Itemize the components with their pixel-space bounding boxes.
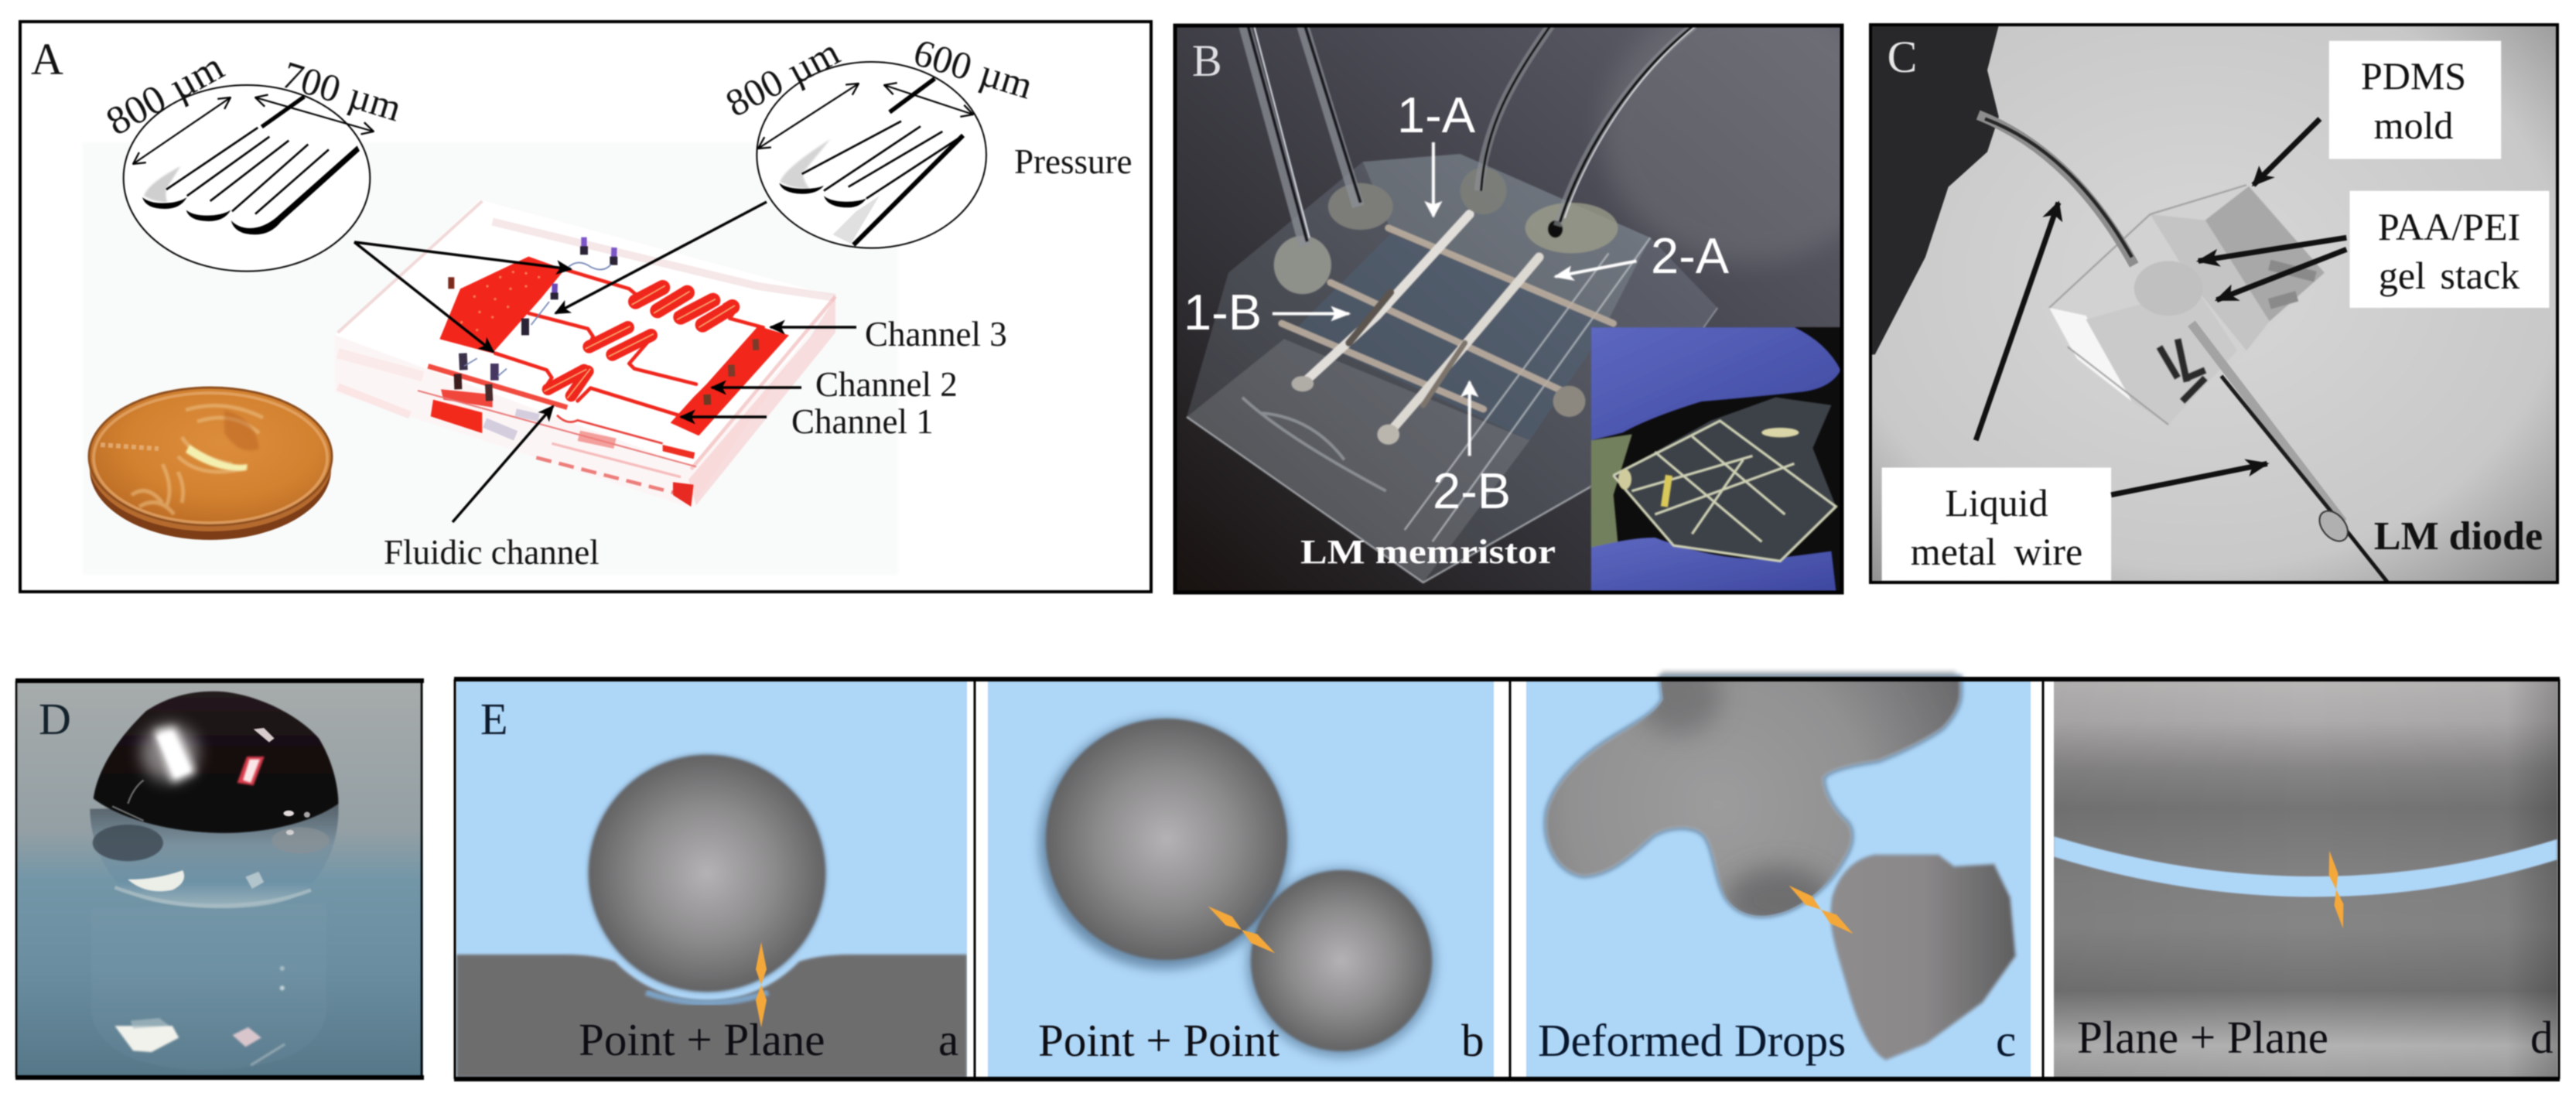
labels C: PAA/PEI	[2378, 205, 2520, 248]
labels d	[2077, 1012, 2553, 1063]
labels A: 800 µm	[99, 44, 231, 144]
silver wires	[1303, 214, 1539, 436]
panel D: liquid metal droplet	[15, 679, 425, 1080]
labels A: A	[31, 34, 63, 84]
labels C: Liquid	[1945, 481, 2048, 524]
chip body	[335, 200, 835, 508]
photo	[1176, 26, 1841, 591]
panel A: microfluidic chip	[20, 22, 1151, 592]
fluid reservoir	[439, 257, 565, 354]
labels C: PDMS	[2361, 54, 2466, 97]
white arrows	[1273, 142, 1636, 456]
outlet bar	[671, 326, 789, 435]
sphere right	[1247, 869, 1436, 1057]
frame C	[1871, 25, 2557, 582]
dark sleeve	[1871, 26, 1999, 354]
gap film	[646, 992, 768, 1002]
arrow	[756, 942, 767, 1027]
labels B: B	[1192, 36, 1222, 86]
labels C: gel stack	[2379, 254, 2520, 297]
label boxes	[1882, 41, 2549, 581]
photo	[1871, 25, 2559, 584]
deformed drop lower	[1831, 855, 2016, 1060]
labels B: 1-A	[1397, 87, 1476, 143]
labels A: 800 µm	[719, 29, 846, 125]
drop shading	[1636, 658, 1833, 936]
reflection	[91, 903, 326, 1071]
labels a	[579, 1014, 958, 1065]
labels A	[31, 29, 1132, 572]
left zoom circle	[124, 85, 370, 272]
PDMS cube	[2049, 185, 2325, 425]
labels A: Pressure	[1014, 142, 1132, 181]
icon: penny	[89, 388, 332, 540]
labels a: a	[938, 1014, 958, 1065]
device plate	[1187, 154, 1717, 582]
labels A: 600 µm	[909, 30, 1038, 108]
wire tube	[1978, 115, 2389, 584]
labels C: LM diode	[2374, 514, 2543, 558]
frame A	[20, 22, 1151, 592]
labels A: Fluidic channel	[384, 533, 600, 572]
label E: E	[480, 694, 507, 744]
labels B: 1-B	[1184, 284, 1262, 340]
labels a: Point + Plane	[579, 1014, 825, 1065]
dimension arrows	[133, 84, 973, 164]
serpentine channels	[495, 269, 764, 415]
labels C: mold	[2374, 104, 2453, 147]
blue film	[2053, 836, 2557, 897]
photo	[15, 679, 425, 1080]
labels d: Plane + Plane	[2077, 1012, 2328, 1063]
subpanel a: point and plane	[456, 681, 967, 1078]
arrow	[2325, 850, 2348, 929]
frame D	[15, 681, 424, 1078]
labels A: Channel 2	[815, 365, 958, 404]
labels C: C	[1888, 32, 1917, 82]
sphere	[587, 753, 827, 993]
tubes	[1245, 26, 1696, 245]
tan strips	[1282, 228, 1613, 409]
black arrows	[1976, 119, 2346, 495]
inset photo	[1591, 327, 1843, 593]
labels B: LM memristor	[1300, 533, 1556, 571]
labels b: b	[1461, 1015, 1484, 1066]
panel B: LM memristor	[1172, 22, 1845, 596]
labels c: c	[1996, 1015, 2016, 1066]
labels B: 2-B	[1433, 463, 1511, 519]
subpanel c: deformed drops	[1526, 658, 2031, 1078]
pins	[451, 237, 756, 405]
subpanel d: plane and plane	[2053, 681, 2557, 1078]
labels c: Deformed Drops	[1538, 1015, 1846, 1066]
labels A: Channel 1	[791, 402, 934, 441]
panel E: contact modes	[454, 658, 2560, 1079]
frame E and dividers	[454, 679, 2560, 1079]
subpanel b: point and point	[988, 681, 1494, 1078]
droplet lower glass	[90, 804, 339, 908]
arrow	[1785, 881, 1857, 938]
chip lower layer streaks	[418, 366, 696, 507]
labels c	[1538, 1015, 2016, 1066]
labels B	[1184, 36, 1730, 571]
electrode fingers left	[142, 97, 360, 234]
labels A: Channel 3	[865, 315, 1007, 354]
labels A: 700 µm	[278, 53, 407, 130]
labels B: 2-A	[1651, 227, 1730, 284]
droplet dark dome	[94, 692, 338, 833]
plane	[456, 955, 967, 1078]
labels C	[1888, 32, 2543, 573]
top bleed	[1662, 671, 1956, 683]
deformed drop upper	[1546, 677, 1960, 916]
labels b	[1038, 1015, 1484, 1066]
deformed drop upper halo	[1546, 677, 1960, 916]
label D: D	[39, 694, 71, 744]
labels b: Point + Point	[1038, 1015, 1280, 1066]
photo background	[83, 142, 898, 575]
arrow	[1205, 902, 1278, 958]
connector blobs	[1274, 168, 1618, 445]
right zoom circle	[757, 62, 986, 248]
labels d: d	[2530, 1012, 2553, 1063]
sphere left	[1039, 719, 1290, 969]
labels C: metal wire	[1911, 530, 2082, 573]
electrode fingers right	[779, 79, 963, 245]
panel C: LM diode	[1871, 25, 2559, 584]
callout arrows	[354, 202, 856, 522]
frame B	[1175, 26, 1842, 593]
